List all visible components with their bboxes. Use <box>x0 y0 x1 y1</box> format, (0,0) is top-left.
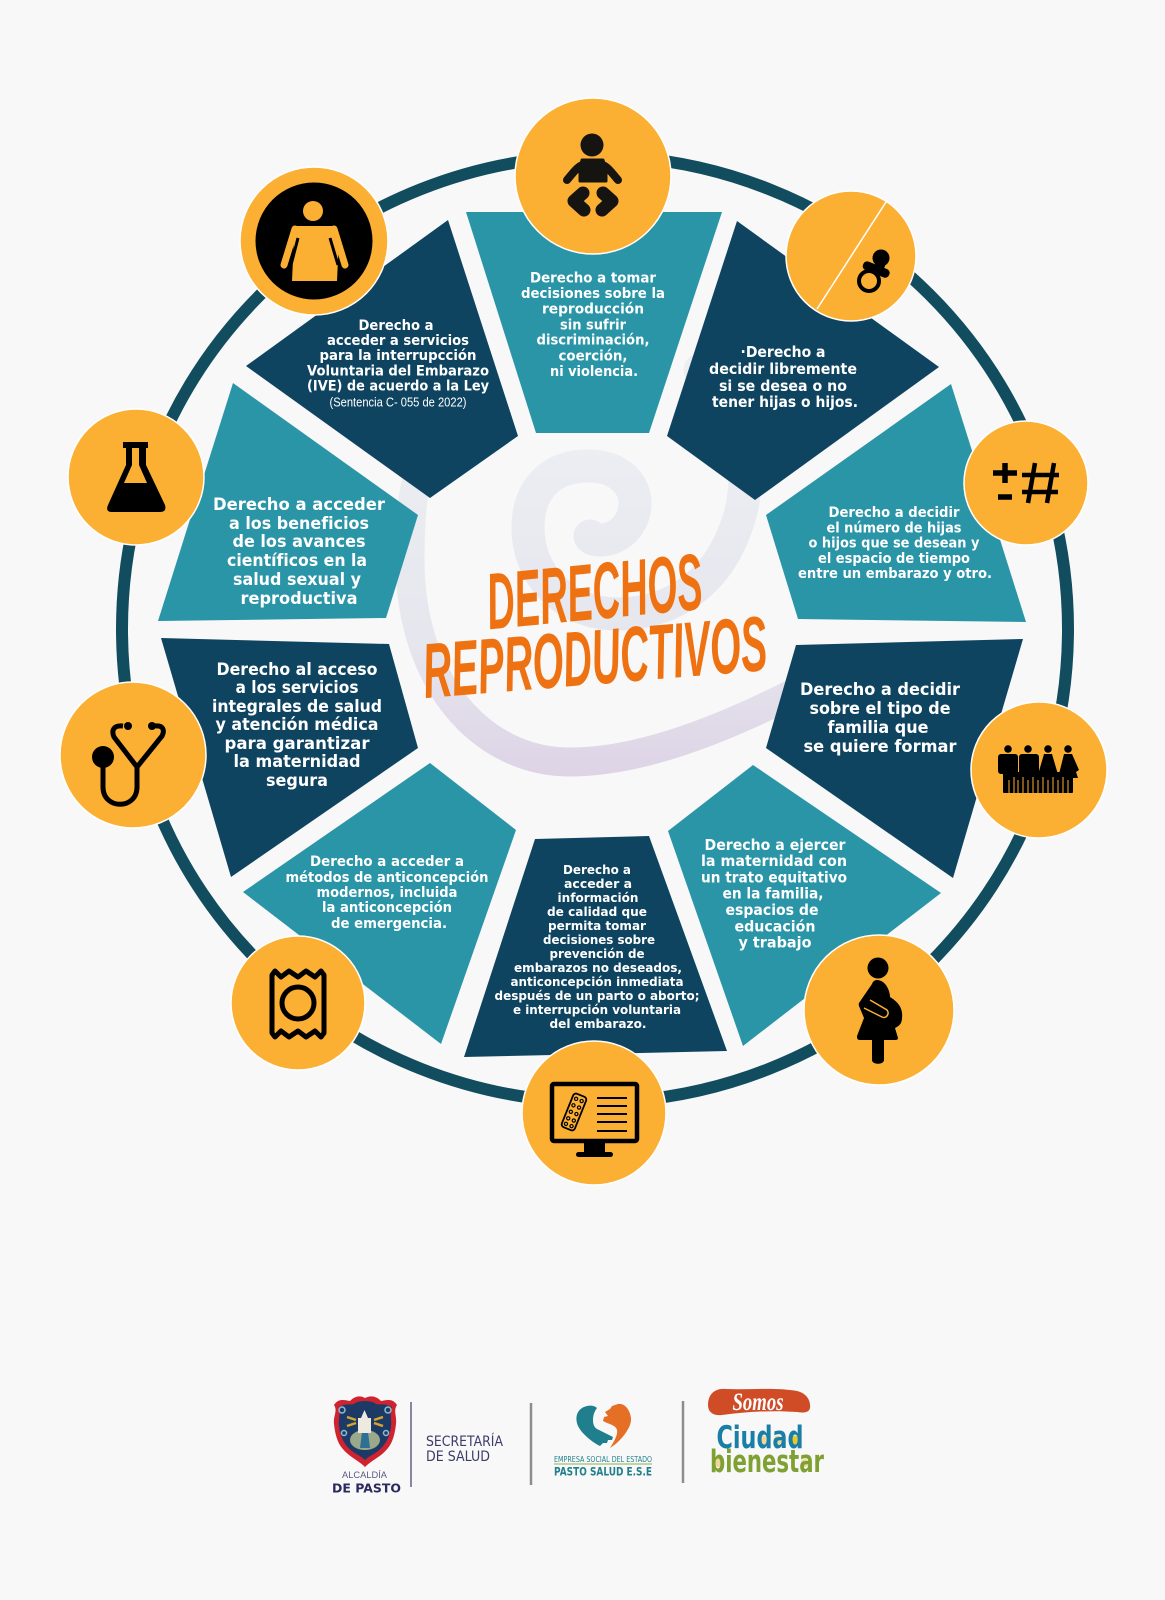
icon: pregnant woman <box>804 935 954 1085</box>
icon: woman <box>240 167 388 315</box>
panel text: embarazos no deseados, <box>514 960 682 975</box>
panel text: para garantizar <box>224 734 370 753</box>
panel text: Derecho a tomar <box>530 270 657 286</box>
panel text: permita tomar <box>548 918 647 933</box>
panel text: Derecho a acceder a <box>310 854 464 870</box>
panel text: Derecho a acceder <box>213 495 386 515</box>
title <box>419 537 770 715</box>
panel text: tener hijas o hijos. <box>712 393 858 411</box>
panel text: Derecho a <box>358 318 434 334</box>
panel: información de calidad <box>464 836 727 1057</box>
panel text: a los beneficios <box>229 514 369 534</box>
panel text: e interrupción voluntaria <box>513 1002 681 1017</box>
shield <box>334 1396 397 1467</box>
panel shape <box>766 639 1023 878</box>
panel text: (IVE) de acuerdo a la Ley <box>307 379 489 395</box>
panel text: discriminación, <box>536 333 650 349</box>
panel text: acceder a <box>564 876 632 891</box>
panel text: de calidad que <box>547 904 647 919</box>
logo: Alcaldía de Pasto <box>332 1396 401 1496</box>
panel text: científicos en la <box>227 551 367 571</box>
logo divider <box>682 1401 684 1483</box>
panel text: ·Derecho a <box>740 343 826 361</box>
panel text: ni violencia. <box>550 364 638 380</box>
panel shape <box>246 220 518 498</box>
De Pasto text: DE PASTO <box>332 1482 401 1496</box>
Ciudad text: Ciudad <box>716 1420 804 1456</box>
panel text <box>709 343 858 411</box>
panel text: la maternidad <box>234 752 360 771</box>
panel text: Derecho a ejercer <box>704 836 846 854</box>
title: DERECHOS <box>483 537 706 646</box>
panel: decidir si tener hijos <box>667 221 939 500</box>
panel: anticoncepción moderna <box>243 763 516 1044</box>
panel text: después de un parto o aborto; <box>494 988 700 1003</box>
icon: stethoscope <box>60 682 206 828</box>
panel text: acceder a servicios <box>327 333 469 349</box>
panel text: en la familia, <box>722 885 824 903</box>
panel text: el número de hijas <box>826 520 962 536</box>
text: Secretaría de Salud <box>426 1433 503 1465</box>
panel text: si se desea o no <box>719 377 847 395</box>
panel text: la maternidad con <box>701 852 847 870</box>
icon: flask <box>68 409 204 545</box>
panel text <box>701 836 847 952</box>
panel: salud materna <box>161 638 418 877</box>
panel text: decidir libremente <box>709 360 857 378</box>
panel text: modernos, incluida <box>316 885 458 901</box>
panel text: familia que <box>828 718 928 738</box>
bienestar text: bienestar <box>710 1444 824 1480</box>
organisation text: EMPRESA SOCIAL DEL ESTADO <box>554 1455 652 1464</box>
icon: family <box>971 702 1107 838</box>
panel text: Derecho a decidir <box>828 505 960 521</box>
panel text: y atención médica <box>216 715 378 734</box>
panel text: y trabajo <box>738 934 812 952</box>
heart mark <box>576 1404 631 1448</box>
panel text: espacios de <box>726 901 818 919</box>
panel: decisiones sin discriminación <box>466 212 722 433</box>
logo divider <box>530 1403 532 1485</box>
panel text: métodos de anticoncepción <box>286 870 488 886</box>
panel shape <box>158 383 418 621</box>
panel shape <box>243 763 516 1044</box>
panel text: de los avances <box>232 532 366 552</box>
panel shape <box>464 836 727 1057</box>
logo: Somos Ciudad Bienestar <box>708 1389 824 1480</box>
panel: avances científicos <box>158 383 418 621</box>
panel text <box>286 854 488 932</box>
panel text <box>494 862 700 1031</box>
panel text: Voluntaria del Embarazo <box>307 364 489 380</box>
panel text <box>521 270 665 380</box>
panel text: salud sexual y <box>233 570 361 590</box>
panel text: decisiones sobre la <box>521 286 665 302</box>
panel text: la anticoncepción <box>322 900 452 916</box>
panel text: sin sufrir <box>560 317 627 333</box>
panel text <box>307 318 489 410</box>
panel text <box>212 660 382 790</box>
panel text <box>798 505 992 582</box>
icon: condom packet <box>231 936 365 1070</box>
outer ring <box>122 156 1068 1102</box>
panel text: educación <box>734 917 816 935</box>
icon: plus-minus number sign <box>964 421 1088 545</box>
logo: Pasto Salud E.S.E <box>554 1404 652 1478</box>
panel shape <box>668 765 941 1046</box>
panel text: se quiere formar <box>804 737 957 757</box>
panel shape <box>667 221 939 500</box>
Alcaldía text: ALCALDÍA <box>342 1470 388 1480</box>
panel text: un trato equitativo <box>701 868 847 886</box>
icon: pacifier <box>786 191 916 321</box>
panel text: decisiones sobre <box>543 932 655 947</box>
icon: monitor with pill blister <box>522 1041 666 1185</box>
panel text: de emergencia. <box>331 916 447 932</box>
panel text: Derecho al acceso <box>216 660 378 679</box>
panel shape <box>766 384 1026 622</box>
panel text: (Sentencia C- 055 de 2022) <box>330 395 466 410</box>
title: REPRODUCTIVOS <box>419 599 770 715</box>
panel: número de hijos <box>766 384 1026 622</box>
panel text <box>800 680 961 757</box>
text: Secretaría de Salud: SECRETARÍA <box>426 1433 503 1450</box>
panel text: reproducción <box>542 302 644 318</box>
panel text: entre un embarazo y otro. <box>798 566 992 582</box>
panel text: integrales de salud <box>212 697 382 716</box>
panel shape <box>466 212 722 433</box>
panel text: a los servicios <box>236 678 359 697</box>
panel text: Derecho a <box>563 862 631 877</box>
panel text: información <box>558 890 638 905</box>
panel text: reproductiva <box>240 589 358 609</box>
logo divider <box>410 1402 412 1487</box>
panel text: segura <box>266 771 328 790</box>
panel: maternidad equitativa <box>668 765 941 1046</box>
background spiral <box>410 370 790 762</box>
panel text: o hijos que se desean y <box>808 536 980 552</box>
panel text: coerción, <box>558 348 628 364</box>
panel: interrupción voluntaria <box>246 220 518 498</box>
panel text: prevención de <box>550 946 644 961</box>
panel shape <box>161 638 418 877</box>
panel text: sobre el tipo de <box>810 699 950 719</box>
panel: tipo de familia <box>766 639 1023 878</box>
panel text: el espacio de tiempo <box>818 551 970 567</box>
Pasto Salud text: PASTO SALUD E.S.E <box>554 1464 652 1478</box>
panel text <box>213 495 386 609</box>
panel text: para la interrupcción <box>320 348 476 364</box>
Somos badge: Somos <box>732 1389 784 1416</box>
panel text: Derecho a decidir <box>800 680 961 700</box>
panel text: anticoncepción inmediata <box>510 974 684 989</box>
panel text: del embarazo. <box>550 1016 646 1031</box>
text: Secretaría de Salud: DE SALUD <box>426 1449 490 1465</box>
icon: baby <box>515 98 671 254</box>
